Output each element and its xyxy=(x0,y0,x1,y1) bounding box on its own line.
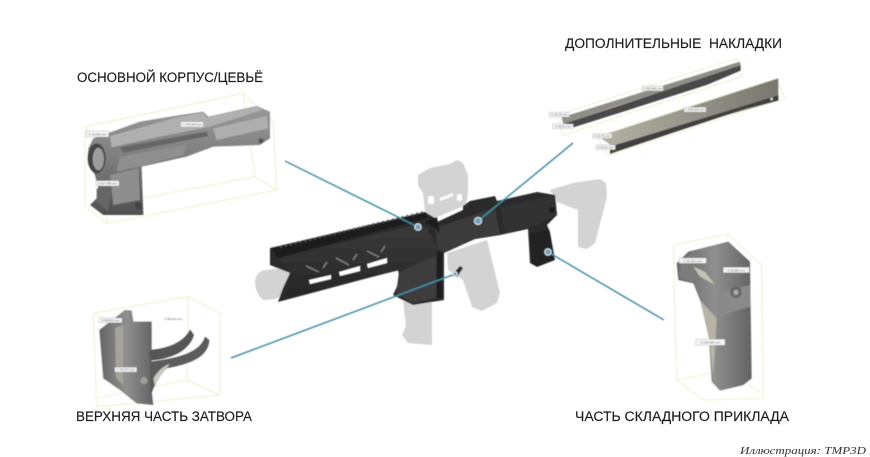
title: upper bolt part: ВЕРХНЯЯ ЧАСТЬ ЗАТВОРА xyxy=(76,409,252,424)
dimension label: Y 70.127 mm xyxy=(117,368,135,372)
dimension label xyxy=(181,122,203,127)
dimension label: Z 127.786 mm xyxy=(98,182,117,186)
part: upper bolt xyxy=(93,297,220,407)
rail teeth xyxy=(280,212,424,247)
credit: Иллюстрация: ТМР3D xyxy=(739,445,866,457)
rifle black body xyxy=(270,192,557,305)
dimension label: Z 18.51 mm xyxy=(598,145,614,149)
title: additional plates: ДОПОЛНИТЕЛЬНЫЕ НАКЛАДКИ xyxy=(565,36,782,51)
dimension label xyxy=(86,131,109,137)
dimension label: X 76.504 mm xyxy=(88,132,107,136)
dimension label xyxy=(96,181,119,186)
dimension label: Y 279.034 mm xyxy=(182,123,202,127)
central rifle assembly xyxy=(231,143,664,358)
ghost sight windows xyxy=(428,193,462,204)
dimension label xyxy=(553,124,573,129)
handguard slots xyxy=(306,246,385,272)
dimension label: Y 241.045 mm xyxy=(643,86,663,90)
dimension label: Z 39.513 mm xyxy=(102,318,120,322)
title: folding stock part: ЧАСТЬ СКЛАДНОГО ПРИКЛАДА xyxy=(575,409,789,424)
dimension label: X 58.014 mm xyxy=(164,317,183,321)
trigger piece xyxy=(451,266,463,277)
dimension label xyxy=(679,258,706,263)
handguard windows xyxy=(309,258,387,284)
dimension label xyxy=(549,112,569,117)
dimension label: Z 46.053 mm xyxy=(728,268,746,272)
part: additional plates xyxy=(549,58,785,155)
part: main body handguard xyxy=(85,93,277,223)
dimension label xyxy=(696,339,725,345)
dimension label: X 32.521 mm xyxy=(684,259,702,263)
dimension label: Z 18.51 mm xyxy=(555,124,571,128)
leader lines xyxy=(231,143,664,358)
dimension label xyxy=(723,267,749,273)
dimension label: X 21.76 mm xyxy=(594,134,611,138)
dimension label: X 120.000 mm xyxy=(701,341,721,345)
stock button xyxy=(549,207,555,213)
ghost: pistol silhouette xyxy=(255,160,607,345)
title: main body: ОСНОВНОЙ КОРПУС/ЦЕВЬЁ xyxy=(77,70,263,85)
dimension label: Y 203.435 mm xyxy=(685,108,705,112)
part: folding stock xyxy=(673,234,763,400)
dimension label: X 23.73 mm xyxy=(551,113,568,117)
